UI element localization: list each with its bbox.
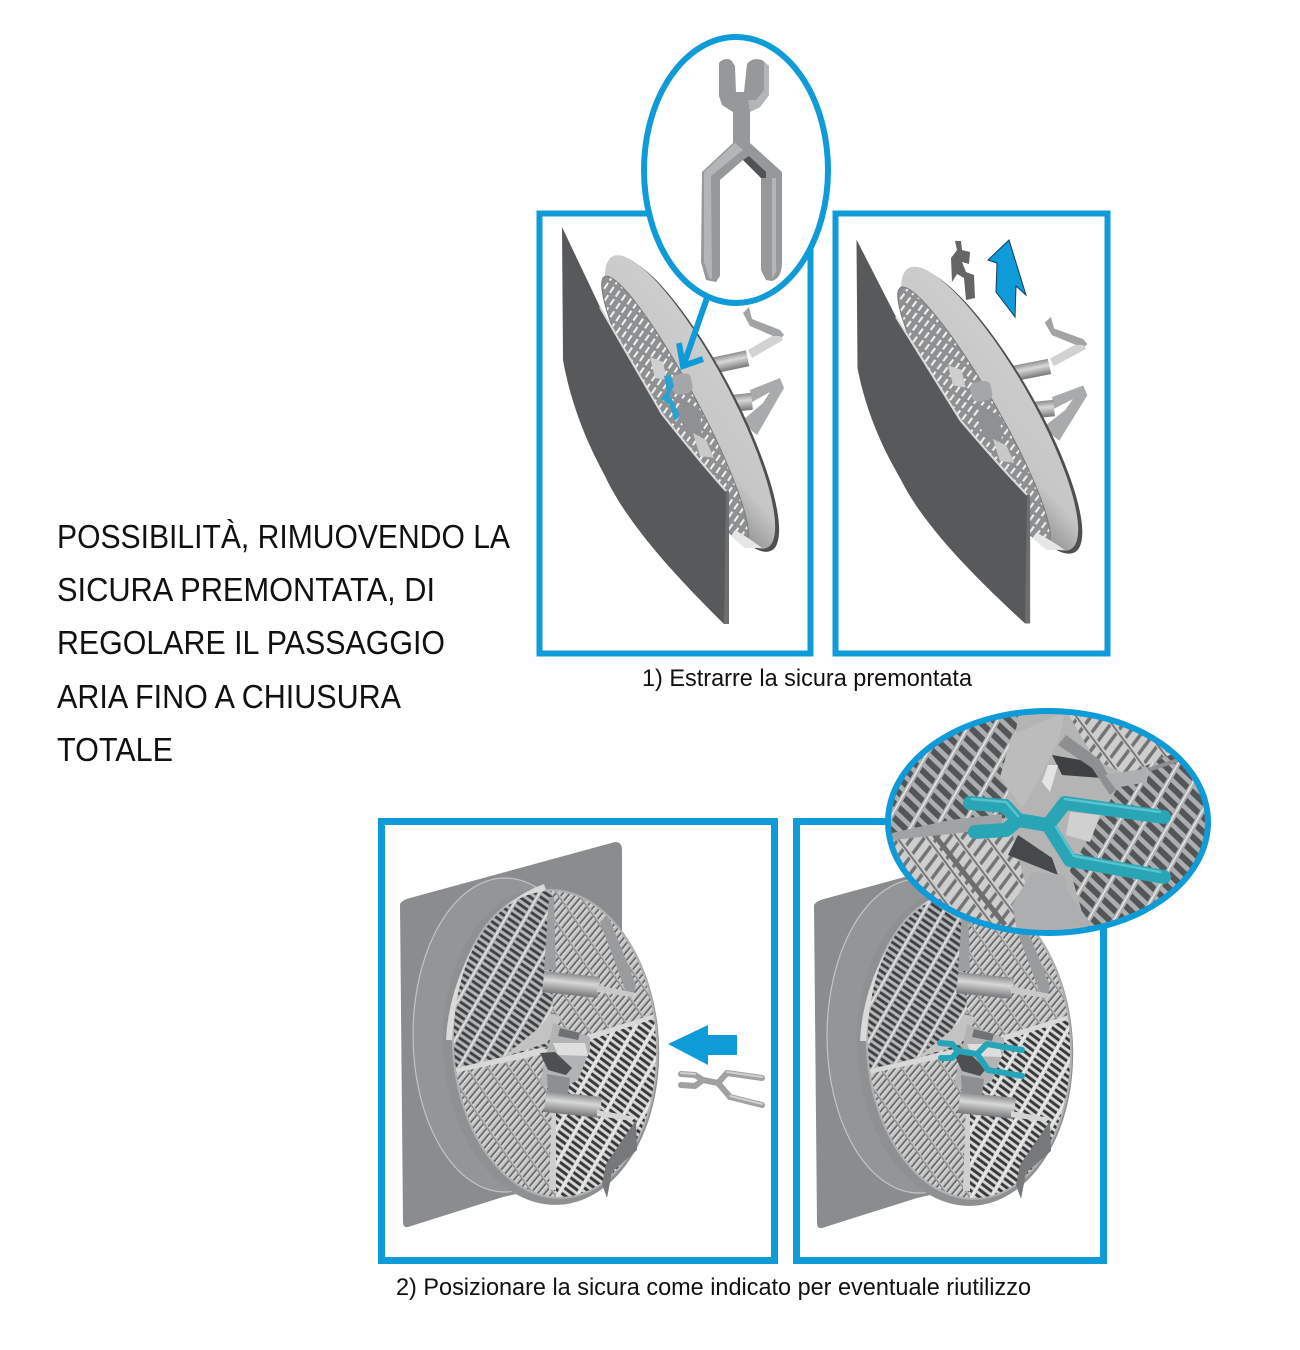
- icon: small teal clip: [940, 1043, 1022, 1076]
- text block: description: [57, 518, 510, 768]
- panel 2 frame: [836, 214, 1108, 654]
- front view of disc with clip: [814, 843, 1084, 1228]
- text block: description: TOTALE: [57, 731, 173, 768]
- magnifier ring: [888, 711, 1208, 933]
- text block: description: SICURA PREMONTATA, DI: [57, 571, 435, 608]
- icon: loose clip: [681, 1072, 762, 1105]
- arrow: up: [988, 240, 1026, 317]
- side view of disc and plate: [562, 227, 807, 624]
- magnifier circle: [644, 37, 828, 303]
- panel 1 frame: [540, 214, 810, 654]
- panel 4 frame: [796, 822, 1104, 1260]
- detail of grate: [891, 714, 1205, 930]
- magnifier: clip installed detail: [885, 700, 1215, 940]
- panel 2: clip removed: [836, 214, 1111, 654]
- panel 3 frame: [382, 822, 774, 1260]
- front view of disc and plate: [400, 842, 670, 1227]
- icon: extracted clip: [951, 241, 975, 300]
- panel 4: clip positioned: [796, 822, 1104, 1260]
- magnifier: clip detail: [644, 37, 828, 303]
- text block: description: POSSIBILITÀ, RIMUOVENDO LA: [57, 518, 510, 555]
- arrow: from magnifier to clip: [679, 298, 707, 366]
- caption 1: 1) Estrarre la sicura premontata: [642, 665, 973, 692]
- panel 1: extract the clip: [540, 214, 810, 654]
- arrow: left: [668, 1025, 737, 1065]
- text block: description: REGOLARE IL PASSAGGIO: [57, 624, 445, 661]
- caption 2: 2) Posizionare la sicura come indicato per eventuale riutilizzo: [396, 1274, 1031, 1301]
- panel 3: position the clip: [382, 822, 774, 1260]
- icon: enlarged clip: [701, 59, 782, 282]
- side view of disc and plate without clip: [856, 240, 1111, 623]
- text block: description: ARIA FINO A CHIUSURA: [57, 678, 401, 715]
- icon: blue clip installed on disc: [661, 375, 680, 421]
- icon: enlarged teal clip: [970, 799, 1164, 877]
